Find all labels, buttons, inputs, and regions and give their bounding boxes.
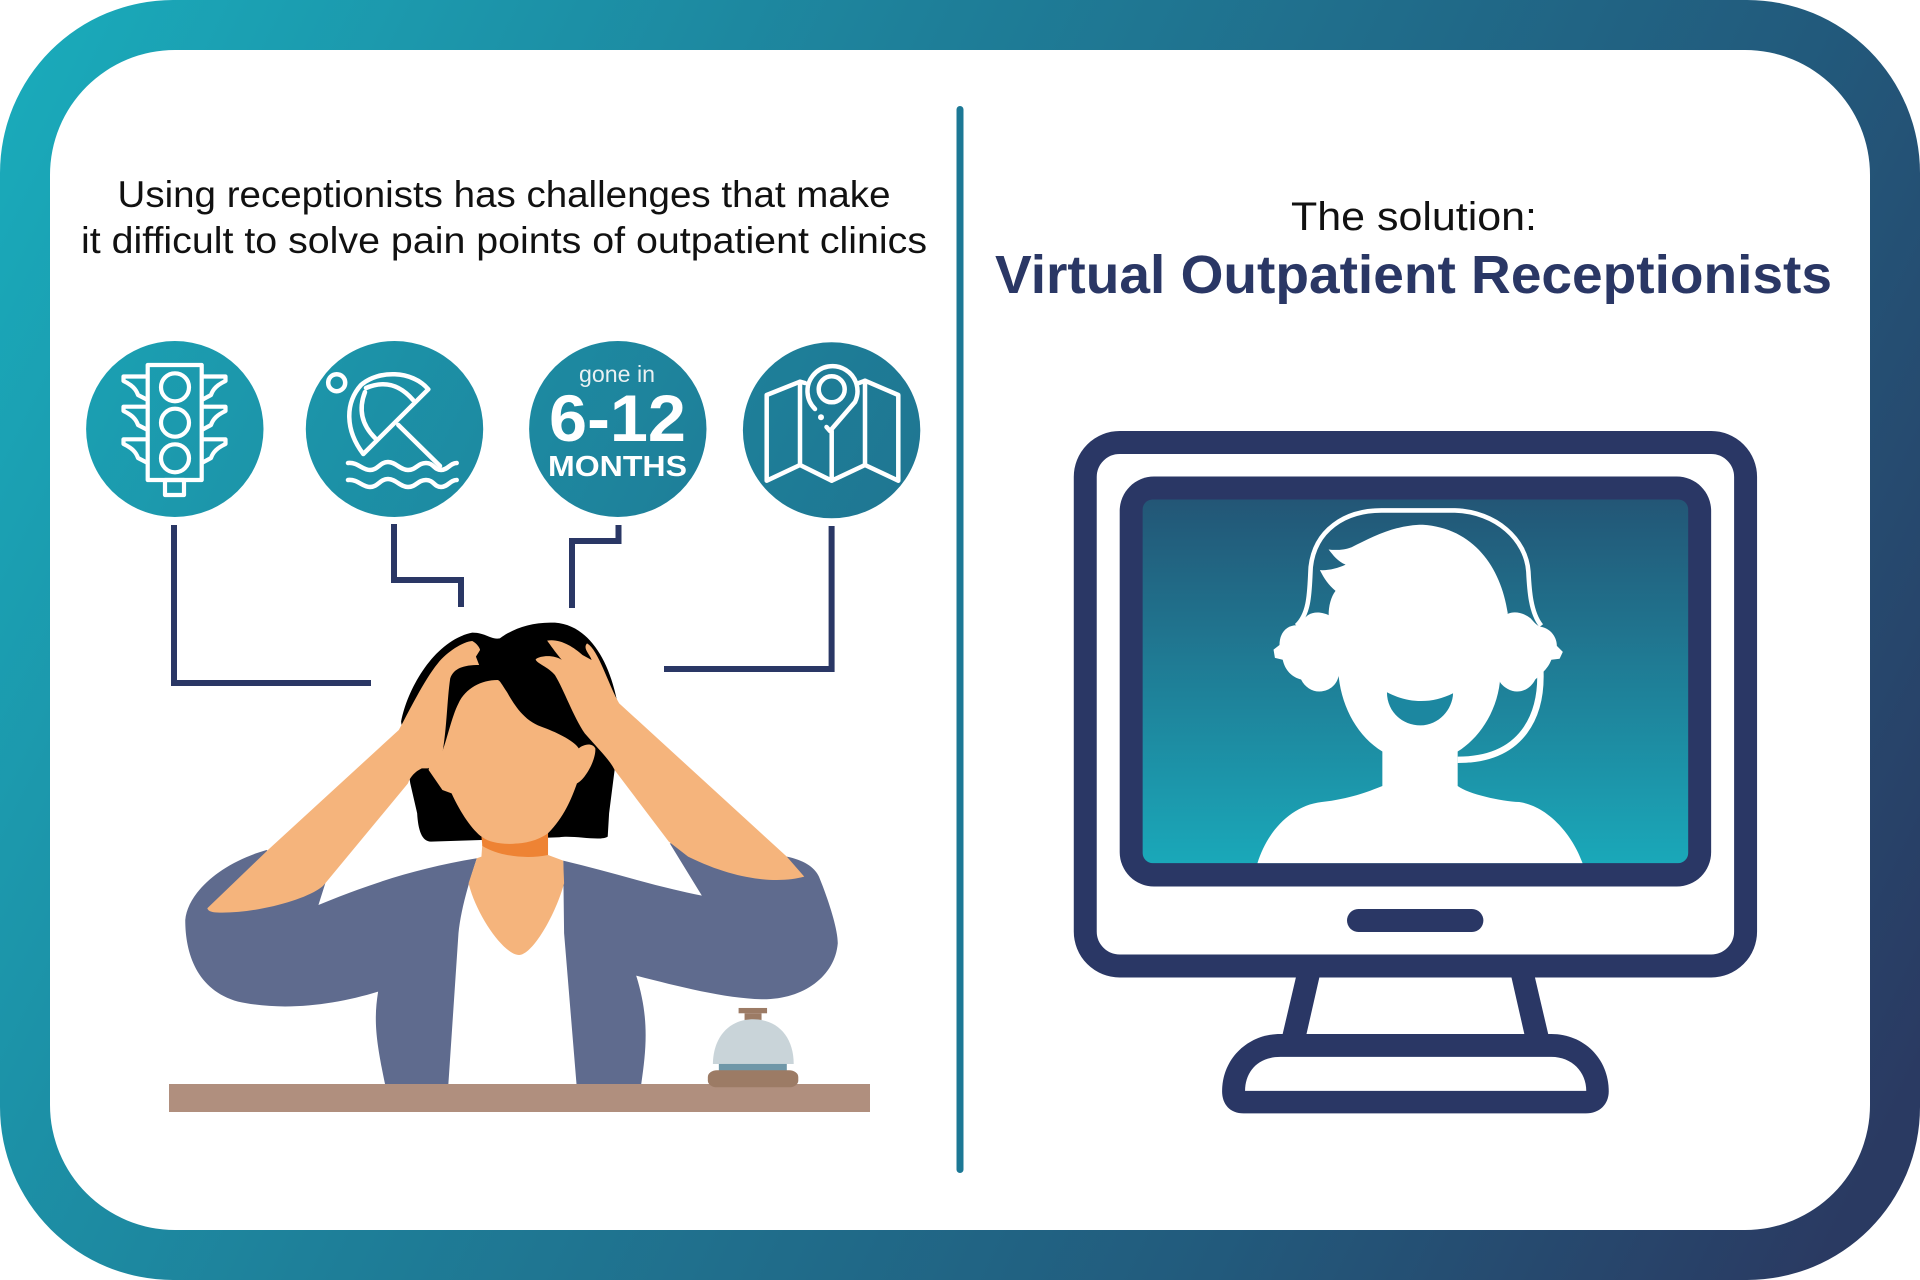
vertical divider	[956, 106, 964, 1173]
left heading	[81, 174, 927, 261]
icon: gone in 6-12 months: MONTHS	[548, 451, 687, 483]
receptionist silhouette	[1257, 510, 1583, 863]
screen bezel	[1120, 476, 1711, 887]
desk	[169, 1084, 870, 1112]
service bell	[708, 1008, 798, 1087]
icon: beach umbrella	[306, 341, 483, 517]
monitor with virtual receptionist	[1085, 443, 1746, 1113]
right heading	[995, 195, 1832, 305]
left arm	[207, 641, 480, 913]
jacket	[185, 843, 838, 1084]
icon: map with pin	[743, 342, 920, 518]
screen	[1143, 499, 1688, 863]
hair	[401, 623, 617, 842]
right arm	[536, 640, 804, 880]
monitor stand	[1222, 971, 1609, 1113]
neck and chest	[469, 833, 564, 955]
monitor button	[1347, 909, 1483, 932]
right heading: Virtual Outpatient Receptionists	[995, 245, 1832, 305]
left heading: it difficult to solve pain points of outpatient clinics	[81, 220, 927, 261]
stressed receptionist figure	[185, 623, 838, 1084]
icon: gone in 6-12 months: 6-12	[549, 381, 686, 455]
monitor casing	[1085, 443, 1746, 966]
right heading: The solution:	[1291, 195, 1537, 239]
icon: traffic light	[86, 341, 264, 517]
icon: gone in 6-12 months: gone in	[579, 361, 655, 387]
collar	[481, 833, 548, 857]
left heading: Using receptionists has challenges that make	[118, 174, 890, 215]
face	[429, 680, 595, 844]
connector lines	[174, 524, 832, 683]
icon: gone in 6-12 months	[529, 341, 706, 517]
